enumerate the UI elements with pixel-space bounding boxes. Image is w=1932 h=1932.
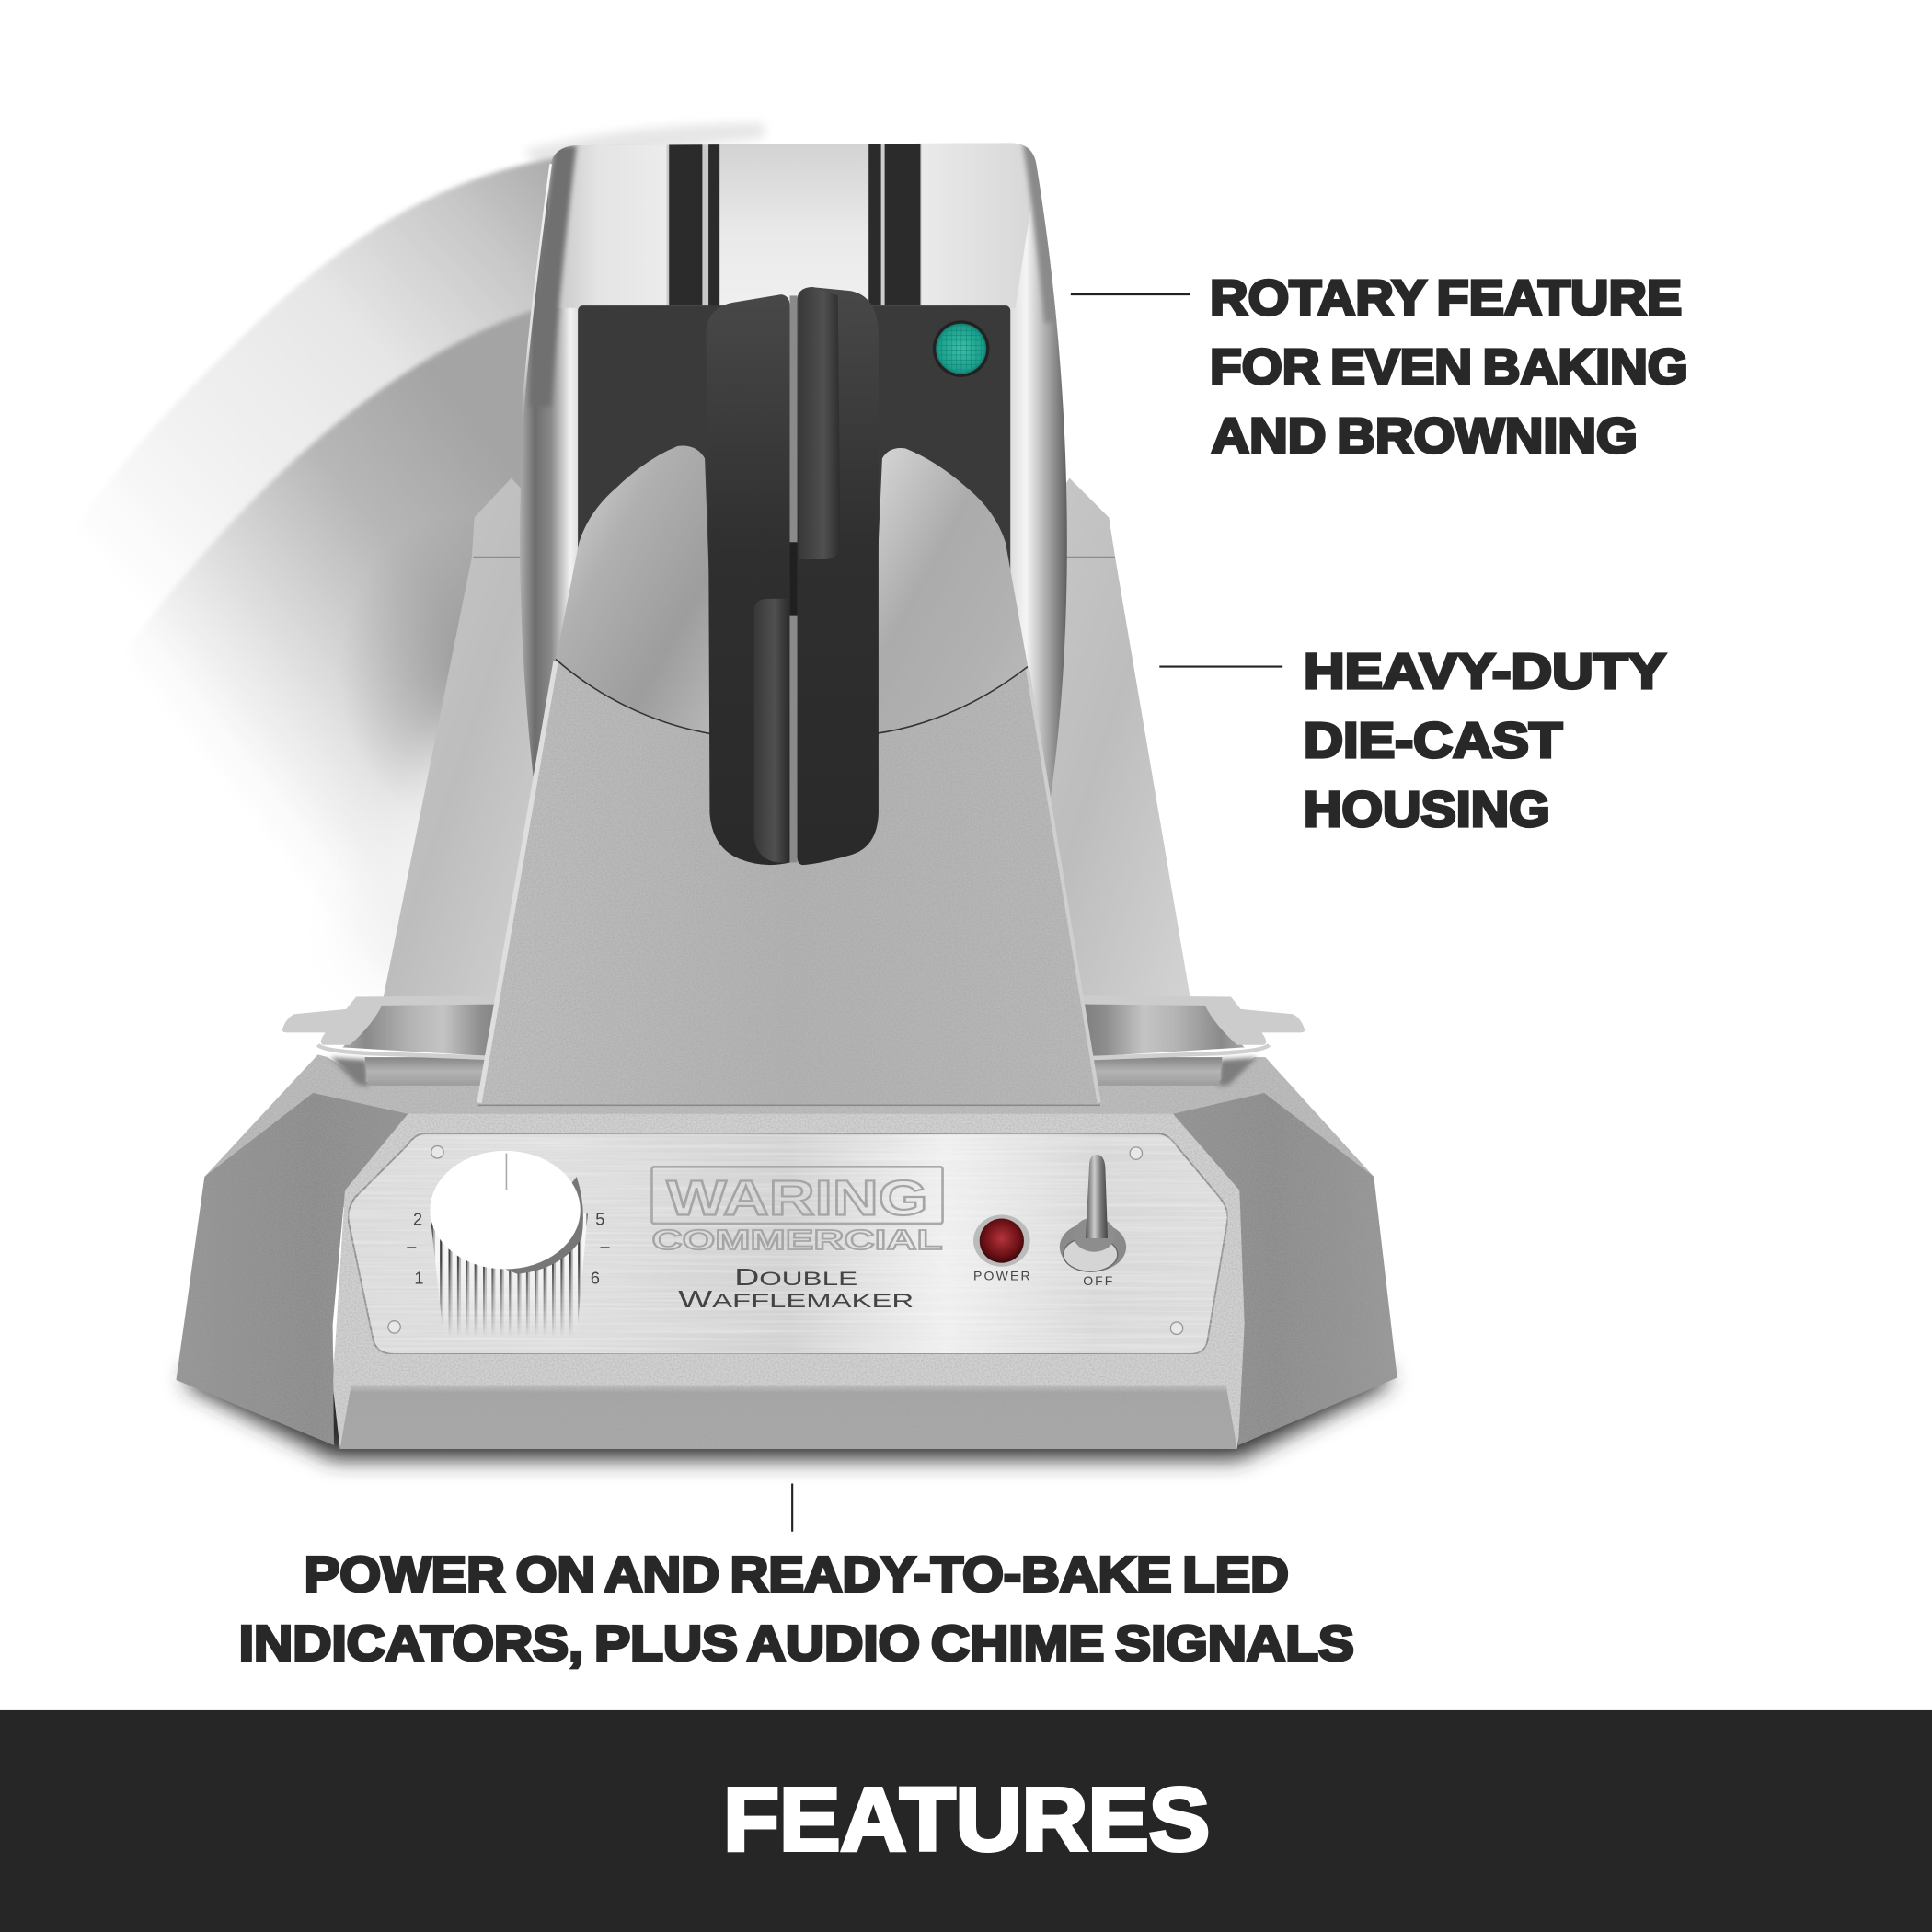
motion swoosh behind the machine (29, 123, 764, 1023)
left drum panel (548, 141, 667, 308)
model name (678, 1265, 914, 1313)
callout: LED indicators and chime: INDICATORS, PLUS AUDIO CHIME SIGNALS (239, 1616, 1354, 1672)
left edge shading (530, 145, 577, 407)
right handle half (798, 287, 879, 865)
control nameplate (348, 1133, 1227, 1354)
callout: die-cast housing (1159, 644, 1666, 837)
model name: D OUBLE (734, 1265, 857, 1291)
callout: rotary feature: ROTARY FEATURE (1210, 270, 1682, 326)
left handle grip tab (754, 599, 788, 863)
embossed WARING logo: COMMERCIAL (651, 1224, 943, 1256)
right edge shading (1023, 143, 1062, 323)
tray outer wall (1082, 1057, 1223, 1086)
embossed WARING logo (651, 1167, 943, 1256)
lower bevel (340, 1385, 1237, 1449)
left drip tray (282, 995, 505, 1086)
left handle half (706, 294, 789, 865)
tray interior (1082, 1003, 1245, 1057)
heading: features: FEATURES (723, 1769, 1210, 1869)
footer banner (0, 1710, 1932, 1932)
temperature knob (430, 1151, 588, 1337)
tray flange (282, 995, 505, 1045)
callout: rotary feature (1071, 270, 1688, 464)
black handle (706, 287, 879, 865)
dial numbers (407, 1210, 611, 1288)
callout: die-cast housing: DIE-CAST (1304, 713, 1562, 768)
callout: LED indicators and chime: POWER ON AND READY-TO-BAKE LED (305, 1547, 1289, 1603)
dial numbers: – (407, 1237, 417, 1256)
model name: W AFFLEMAKER (678, 1287, 914, 1313)
waffle drum (520, 141, 1067, 850)
dial numbers: 2 (413, 1210, 422, 1228)
tray rim (1082, 1045, 1269, 1058)
right handle grip tab (799, 287, 840, 559)
right side facet (1173, 1093, 1397, 1445)
tray interior (342, 1003, 505, 1057)
centre drum panel (719, 141, 868, 306)
dark hinge bands (669, 141, 920, 306)
base (177, 1054, 1397, 1449)
power toggle switch: OFF (1083, 1273, 1113, 1288)
tray well shadows (330, 1057, 1257, 1087)
tray outer wall (364, 1057, 505, 1086)
front stand horns (556, 445, 1028, 734)
callout: die-cast housing: HOUSING (1304, 782, 1550, 837)
icon: green ready LED (933, 320, 989, 377)
mounting screws (388, 1146, 1183, 1334)
left side facet (177, 1093, 408, 1445)
power toggle switch (1060, 1155, 1126, 1288)
callout: rotary feature: AND BROWNING (1212, 408, 1638, 464)
shadow under the base (188, 1370, 1387, 1459)
callout: die-cast housing: HEAVY-DUTY (1304, 644, 1666, 699)
dial numbers: 1 (414, 1270, 423, 1288)
callout: LED indicators and chime (239, 1483, 1354, 1672)
right drum panel (922, 141, 1041, 308)
base top surface (204, 1054, 1374, 1207)
rear support legs (384, 478, 1190, 998)
tray rim (318, 1045, 505, 1058)
lower matte stand (478, 660, 1100, 1105)
dial numbers: – (601, 1237, 611, 1256)
power LED (973, 1215, 1030, 1283)
dark control plate (578, 305, 1010, 589)
embossed WARING logo: WARING (667, 1172, 927, 1226)
dial numbers: 6 (591, 1270, 600, 1288)
dial numbers: 5 (595, 1210, 604, 1228)
tray flange (1082, 995, 1305, 1045)
callout: rotary feature: FOR EVEN BAKING (1210, 339, 1688, 395)
power LED: POWER (973, 1269, 1030, 1283)
front face (333, 1114, 1247, 1449)
stand edge lines (478, 660, 1100, 1105)
right drip tray (1082, 995, 1305, 1086)
drum top panels and hinge bands (530, 141, 1062, 407)
